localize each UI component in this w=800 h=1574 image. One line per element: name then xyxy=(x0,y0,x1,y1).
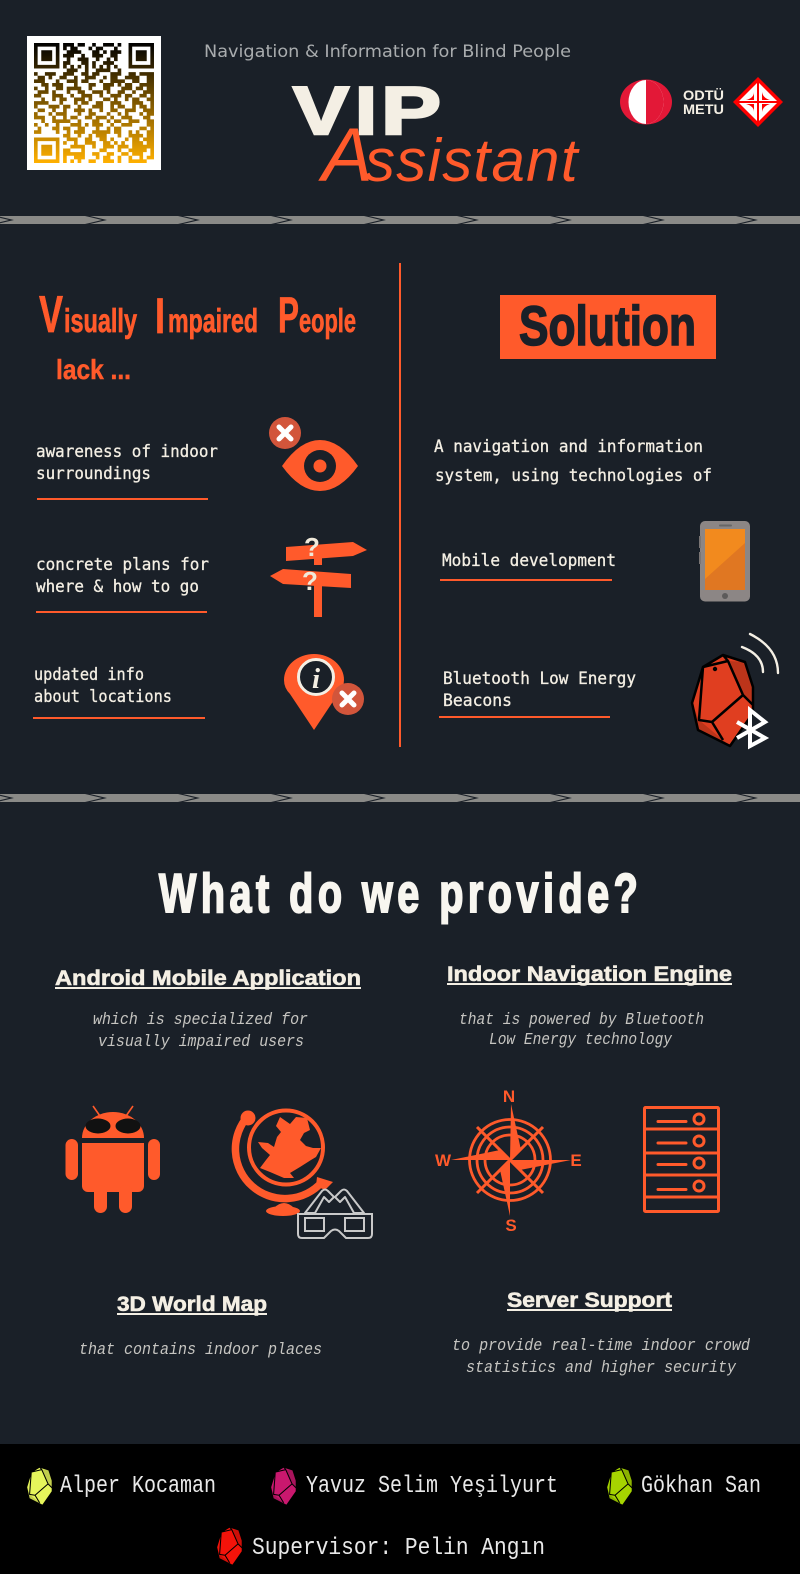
text: intro xyxy=(434,437,712,485)
supervisor: Pelin Angın xyxy=(217,1527,545,1565)
block: 3D World Map: 3D World Map xyxy=(117,1293,267,1316)
icon: crossed eye xyxy=(269,417,358,491)
heading: What do we provide: What do we provide? xyxy=(159,864,638,925)
divider arrows xyxy=(0,214,800,226)
title: Assistant: A xyxy=(318,113,374,198)
text: awareness: surroundings xyxy=(36,464,151,483)
block: Indoor Navigation Engine xyxy=(447,963,732,1049)
icon: location pin xyxy=(284,654,364,730)
text: updated info xyxy=(34,665,172,706)
member: Gökhan San xyxy=(607,1467,761,1505)
heading: Visually Impaired People: P xyxy=(278,287,299,343)
member: Alper Kocaman: Alper Kocaman xyxy=(60,1473,216,1500)
icon: compass: N xyxy=(503,1087,515,1106)
vertical divider xyxy=(399,263,401,747)
icon: signpost: ? xyxy=(304,532,320,562)
block: Android Mobile Application: Android Mobile Application xyxy=(55,967,361,990)
text: intro: system, using technologies of xyxy=(435,466,712,485)
icon: location pin: i xyxy=(312,663,320,695)
subheading: lack: lack ... xyxy=(56,354,131,385)
text: updated info: updated info xyxy=(34,665,144,684)
title: VIP: P xyxy=(381,73,441,149)
member: Yavuz Selim Yeşilyurt: Yavuz Selim Yeşilyurt xyxy=(306,1473,558,1500)
supervisor: Pelin Angın: Supervisor: Pelin Angın xyxy=(252,1535,545,1562)
logo: METU: METU xyxy=(683,102,724,117)
text: bluetooth: Bluetooth Low Energy xyxy=(443,669,636,688)
block: Server Support: Server Support xyxy=(507,1289,672,1312)
title: VIP xyxy=(293,73,441,149)
QR code xyxy=(27,36,161,170)
block: Android Mobile Application: which is specialized for xyxy=(93,1010,308,1029)
block: Server Support: to provide real-time indoor crowd xyxy=(452,1336,750,1355)
panel: problem xyxy=(33,286,367,730)
text: plans: concrete plans for xyxy=(36,555,209,574)
title: VIP: V xyxy=(293,73,349,149)
text: awareness xyxy=(36,442,218,483)
title: VIP: I xyxy=(355,73,377,149)
icon: android xyxy=(66,1106,160,1213)
title: Assistant: ssistant xyxy=(365,127,580,194)
block: 3D World Map: that contains indoor places xyxy=(79,1340,322,1359)
member: Alper Kocaman xyxy=(27,1467,216,1505)
heading: Visually Impaired People: eople xyxy=(299,302,356,339)
icon: signpost xyxy=(270,532,367,617)
logo: METU: ODTÜ xyxy=(683,88,724,103)
panel: solution xyxy=(434,294,778,746)
block: 3D World Map xyxy=(79,1293,322,1359)
icon: beacon xyxy=(692,634,778,746)
block: Indoor Navigation Engine: Low Energy technology xyxy=(489,1030,673,1049)
block: Server Support xyxy=(452,1289,750,1377)
text: awareness: awareness of indoor xyxy=(36,442,218,461)
heading: Visually Impaired People: mpaired xyxy=(168,302,258,339)
block: Server Support: statistics and higher security xyxy=(466,1358,737,1377)
icon: phone xyxy=(699,521,750,602)
block: Android Mobile Application: visually impaired users xyxy=(98,1032,304,1051)
icon: globe with 3D glasses xyxy=(235,1110,372,1238)
divider arrows xyxy=(0,792,800,804)
text: plans: where & how to go xyxy=(36,577,199,596)
icon: compass: S xyxy=(505,1216,517,1235)
heading: Visually Impaired People xyxy=(39,286,356,344)
tagline: Navigation & Information for Blind People xyxy=(204,42,571,62)
text: bluetooth xyxy=(443,669,636,710)
block: Indoor Navigation Engine: Indoor Navigation Engine xyxy=(447,963,732,986)
text: bluetooth: Beacons xyxy=(443,691,512,710)
text: intro: A navigation and information xyxy=(434,437,703,456)
icon: compass: E xyxy=(570,1151,582,1170)
heading: Visually Impaired People: V xyxy=(39,286,63,344)
heading: Visually Impaired People: isually xyxy=(64,302,137,339)
heading: Solution: Solution xyxy=(519,294,696,357)
icon: server rack xyxy=(644,1108,718,1212)
icon: signpost: ? xyxy=(302,566,318,596)
text: plans xyxy=(36,555,209,596)
member: Yavuz Selim Yeşilyurt xyxy=(271,1467,558,1505)
member: Gökhan San: Gökhan San xyxy=(641,1473,761,1500)
heading: Visually Impaired People: I xyxy=(155,288,165,344)
block: Indoor Navigation Engine: that is powered by Bluetooth xyxy=(459,1010,704,1029)
block: Android Mobile Application xyxy=(55,967,361,1051)
text: mobile development: Mobile development xyxy=(442,551,616,570)
text: updated info: about locations xyxy=(34,687,172,706)
icon: compass: W xyxy=(435,1151,452,1170)
logo: METU xyxy=(620,77,783,127)
icon: compass xyxy=(435,1087,582,1235)
footer: team xyxy=(0,1444,800,1574)
